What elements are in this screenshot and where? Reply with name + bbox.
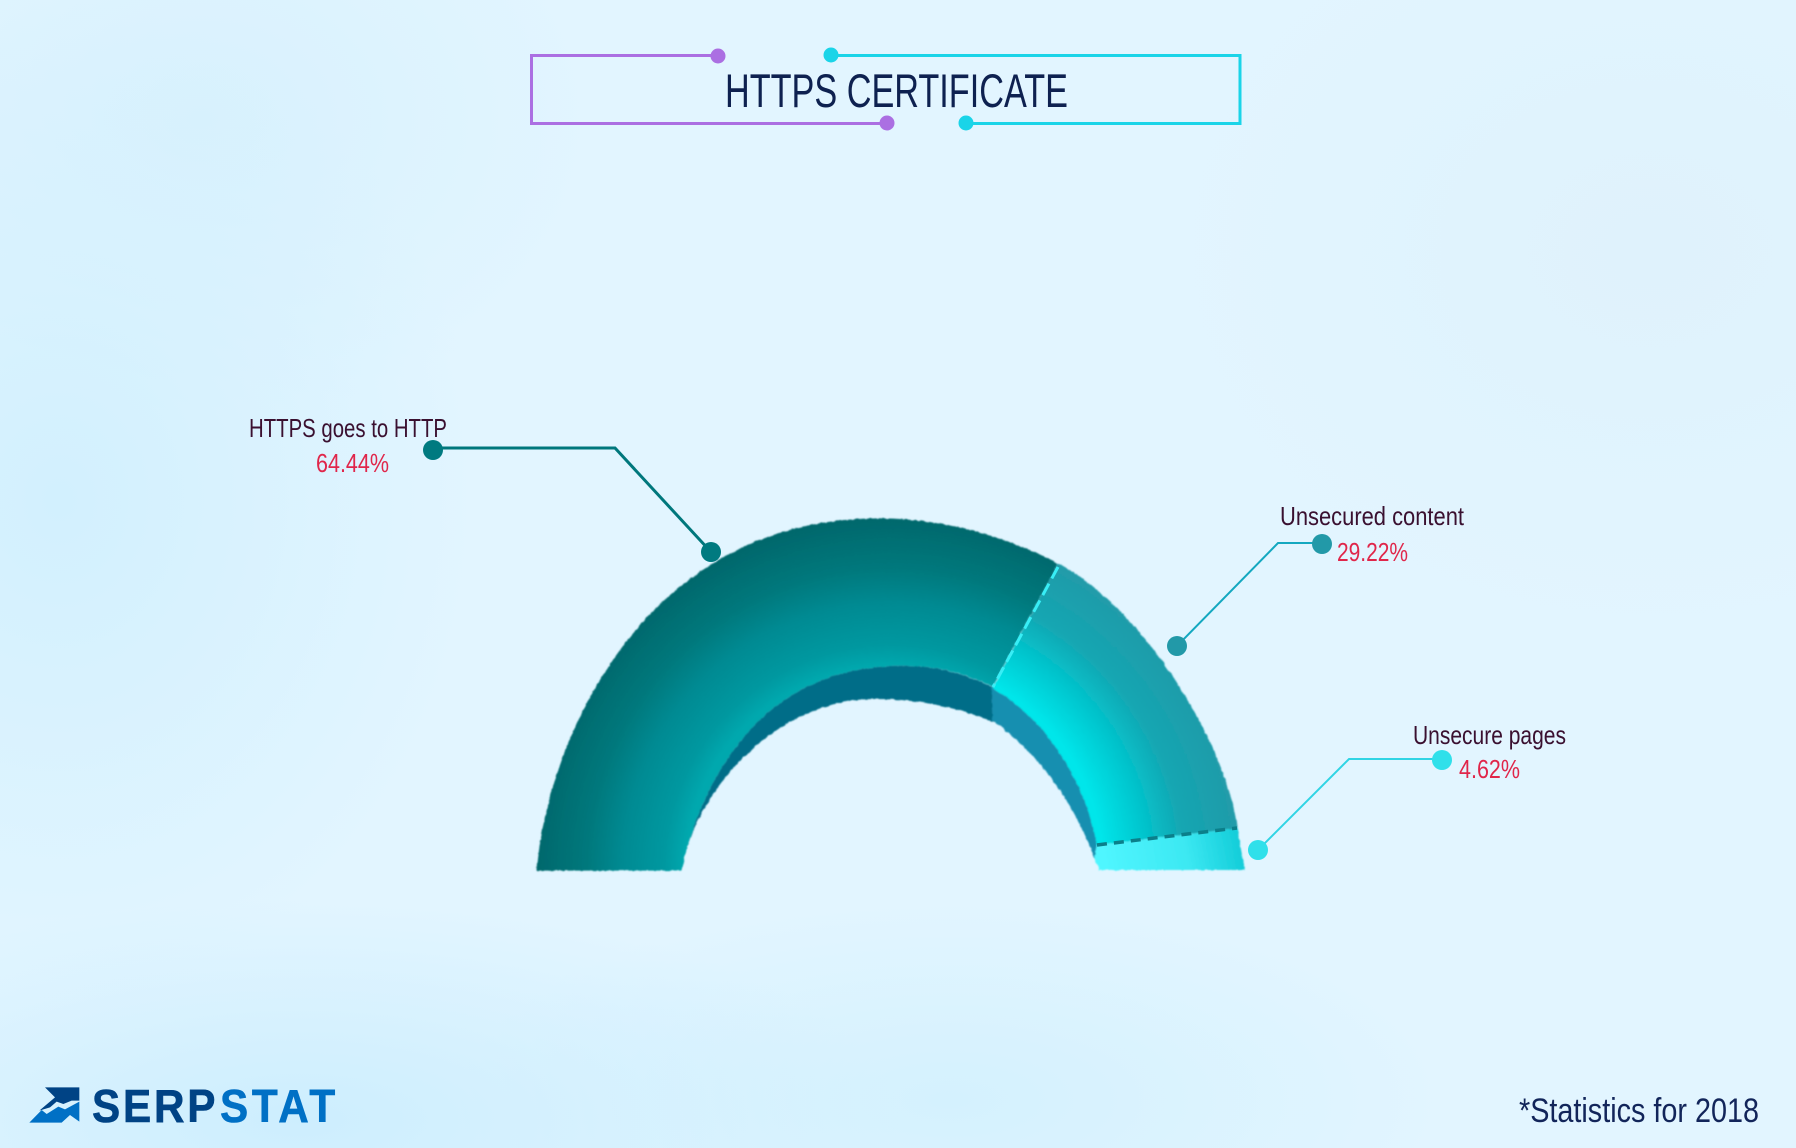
callout: HTTPS goes to HTTP: 64.44% [316,448,389,478]
wordmark: STAT: STAT [220,1081,339,1132]
divider: dark dashed [1097,828,1237,845]
divider: cyan dashed [993,567,1058,687]
inner wall: dark segment [687,666,995,847]
icon: rising chart arrow [29,1087,79,1123]
title frame [532,48,1240,130]
footnote: *Statistics for 2018 [1519,1092,1759,1130]
callout: Unsecured content: Unsecured content [1280,501,1465,531]
title: HTTPS CERTIFICATE [725,64,1068,117]
frame: purple bracket [532,48,894,130]
segment: HTTPS goes to HTTP 64.44% [537,518,1058,871]
segment: Unsecure pages 4.62% [1094,828,1245,870]
callout: Unsecure pages: 4.62% [1459,754,1520,784]
callout: Unsecured content [1167,501,1465,656]
logo: Serpstat [29,1081,339,1132]
inner wall: mid segment [991,687,1102,858]
callout: HTTPS goes to HTTP [249,413,721,562]
frame: cyan bracket [824,48,1240,130]
wordmark: SERP: SERP [92,1081,218,1132]
callout: HTTPS goes to HTTP: HTTPS goes to HTTP [249,413,447,443]
callout: Unsecure pages: Unsecure pages [1413,720,1566,750]
callout: Unsecured content: 29.22% [1337,537,1408,567]
semicircle chart [537,518,1245,871]
segment: Unsecured content 29.22% [993,563,1237,845]
callout: Unsecure pages [1248,720,1566,860]
